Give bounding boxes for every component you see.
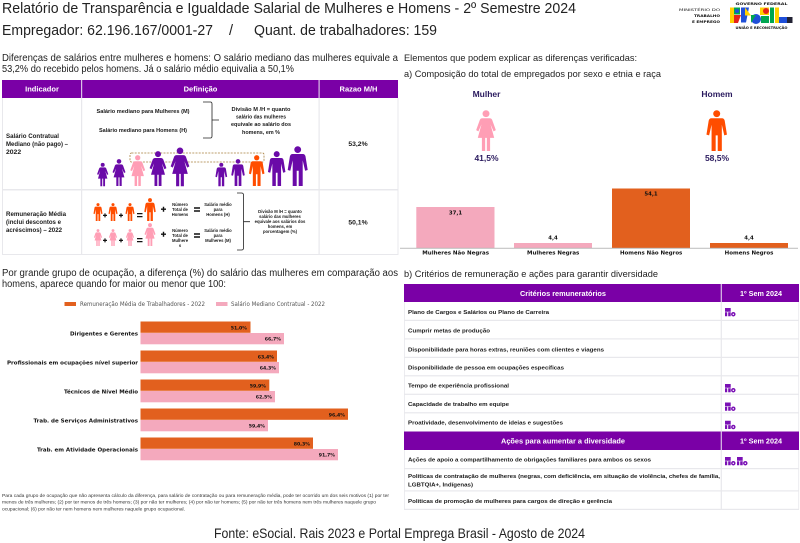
value labels: 64,3% [260, 366, 276, 372]
subheading b: b) Critérios de remuneração e ações para garantir diversidade [404, 269, 658, 280]
bars [140, 322, 348, 460]
average division explanation: salário das mulheres [259, 214, 301, 219]
subheading a: a) Composição do total de empregados por sexo e etnia e raça [404, 69, 662, 80]
employer information: Empregador: 62.196.167/0001-27 [2, 23, 213, 39]
criteria rows: Disponibilidade para horas extras, reuniões com clientes e viagens [408, 347, 605, 353]
formula: men average: Salário médio [204, 202, 232, 207]
bar chart: composition by sex and race [400, 188, 798, 257]
value labels: 62,5% [256, 395, 272, 401]
median division explanation: Divisão M /H = quanto [232, 107, 291, 113]
row definition: median salary text [96, 109, 190, 134]
bar chart: composition by sex and race: Mulheres Negras [527, 251, 579, 257]
bar chart: composition by sex and race: Homens Não Negros [620, 251, 682, 257]
panel: criteria table [404, 284, 799, 510]
table header [2, 80, 398, 98]
median division explanation: equivale ao salário dos [231, 122, 291, 128]
diversity rows [408, 458, 720, 505]
criteria rows: Cumprir metas de produção [408, 328, 490, 334]
formula: men average: para [214, 207, 223, 212]
formula: men average: Total de [172, 207, 189, 212]
panel: Mulher share [473, 89, 501, 163]
legend: Remuneração Média de Trabalhadores - 2022 [80, 301, 205, 308]
icons: diversity marks [725, 457, 747, 465]
icons: criteria marks [725, 308, 735, 429]
header: Ações para aumentar a diversidade: Ações para aumentar a diversidade [501, 438, 625, 446]
row label: Salário Contratual Mediano: 2022 [6, 149, 21, 156]
median division explanation [231, 107, 291, 136]
occupation heading: Por grande grupo de ocupação, a diferença (%) do salário das mulheres em comparação aos [2, 268, 398, 279]
header: Ações para aumentar a diversidade [404, 432, 799, 450]
bar chart: occupations [7, 301, 348, 460]
diversity rows: LGBTQIA+, Indígenas) [408, 482, 473, 488]
bar chart: composition by sex and race: Homens Negros [725, 251, 773, 257]
category labels: Trab. de Serviços Administrativos [34, 418, 139, 424]
value labels: 63,4% [258, 354, 274, 360]
category labels: Trab. em Atividade Operacionais [37, 447, 139, 453]
logo: Governo Federal Brasil: GOVERNO FEDERAL [736, 1, 788, 6]
header: Critérios remuneratórios: 1º Sem 2024 [740, 291, 782, 298]
bracket: median [203, 102, 219, 138]
value labels: 91,7% [319, 453, 335, 459]
bar chart: composition by sex and race: 4,4 [744, 235, 754, 241]
logo: Ministério do Trabalho e Emprego: MINISTÉRIO DO [679, 7, 720, 12]
logo: Governo Federal Brasil: UNIÃO E RECONSTRUÇÃO [736, 25, 788, 30]
bracket: average [237, 193, 250, 250]
average division explanation: equivale aos salários dos [255, 219, 306, 224]
median division explanation: salário das mulheres [236, 114, 286, 120]
header: Ações para aumentar a diversidade: 1º Sem 2024 [740, 438, 782, 446]
formula: women average: Mulhere [172, 238, 189, 243]
formula: women average: Número [172, 228, 188, 233]
intro text: salary differences [2, 53, 398, 75]
legend: Salário Mediano Contratual - 2022 [231, 301, 325, 308]
criteria rows: Disponibilidade de pessoa em ocupações específicas [408, 366, 565, 372]
panel: Mulher share: Mulher [473, 89, 501, 99]
header: Critérios remuneratórios: Critérios remuneratórios [520, 291, 606, 298]
formula: women average: para [214, 233, 223, 238]
logo: Governo Federal Brasil [730, 1, 792, 30]
average division explanation: homens, em [268, 224, 292, 229]
employer information: / [229, 23, 234, 39]
category labels: Profissionais em ocupações nível superior [7, 359, 138, 366]
panel: Homem share [701, 89, 733, 163]
bar chart: composition by sex and race: 37,1 [449, 210, 462, 216]
row label: Remuneração Média: acréscimos) – 2022 [6, 227, 62, 234]
row label: Salário Contratual Mediano [6, 133, 68, 156]
median dashed highlight [130, 153, 264, 162]
value: 53,2%: 53,2% [348, 141, 368, 148]
criteria rows: Tempo de experiência profissional [408, 384, 509, 390]
logo: Ministério do Trabalho e Emprego [679, 7, 720, 24]
value labels [231, 325, 345, 459]
footnote [2, 493, 389, 512]
footnote: Para cada grupo de ocupação que não apresenta cálculo da diferença, para salário de contratação ou para remuneração média, pode ter ocorrido um dos seis motivos (1) por ter [2, 493, 389, 499]
value labels: 66,7% [265, 337, 281, 343]
table header: Razao M/H [340, 84, 377, 94]
formula: men average: Número [172, 202, 188, 207]
diversity rows: Ações de apoio a compartilhamento de obrigações familiares para ambos os sexos [408, 458, 652, 464]
category labels [7, 331, 139, 453]
table header: Indicador [25, 84, 59, 94]
row definition: median salary text: Salário mediano para Mulheres (M) [96, 109, 190, 115]
icons: five women in ascending order [97, 147, 189, 186]
value labels: 59,4% [249, 424, 265, 430]
intro text: salary differences: Diferenças de salários entre mulheres e homens: O salário mediano das mulheres equivale a [2, 53, 398, 64]
bar chart: composition by sex and race: 4,4 [548, 235, 558, 241]
row label: Remuneração Média: (inclui descontos e [6, 219, 61, 226]
bar chart: composition by sex and race: 54,1 [644, 192, 658, 198]
panel: Mulher share: 41,5% [474, 153, 499, 163]
criteria rows [408, 310, 605, 427]
formula: women average [94, 223, 232, 248]
criteria rows: Capacidade de trabalho em equipe [408, 402, 510, 408]
average division explanation: porcentagem (%) [263, 229, 298, 234]
value labels: 59,9% [250, 383, 266, 389]
logo: Ministério do Trabalho e Emprego: TRABALHO [694, 14, 720, 18]
panel: indicator table [2, 80, 398, 255]
row label: Salário Contratual Mediano: Mediano (não pago) – [6, 141, 68, 148]
diversity rows: Políticas de contratação de mulheres (negras, com deficiência, em situação de violência, chefes de família, [408, 474, 720, 480]
table header: Definição [184, 84, 218, 94]
median division explanation: homens, em % [242, 130, 280, 136]
row label: Remuneração Média [6, 211, 66, 234]
formula: women average: Salário médio [204, 228, 232, 233]
footnote: menos de três mulheres; (2) por ter menos de três homens; (3) por não ter mulheres; (4) por não ter homens; (5) por não ter três homens nem três mulheres naquele grupo [2, 500, 376, 506]
title: Relatório de Transparência e Igualdade Salarial de Mulheres e Homens - 2º Semestre 2024 [2, 0, 576, 17]
average division explanation [255, 209, 306, 234]
value: 50,1%: 50,1% [348, 220, 368, 226]
employer information [2, 23, 437, 39]
criteria rows: Proatividade, desenvolvimento de ideias e sugestões [408, 421, 564, 427]
criteria rows: Plano de Cargos e Salários ou Plano de Carreira [408, 310, 550, 316]
employer information: Quant. de trabalhadores: 159 [254, 23, 437, 39]
formula: women average: Total de [172, 233, 189, 238]
value labels: 80,3% [294, 441, 310, 447]
occupation heading [2, 268, 398, 290]
average division explanation: Divisão M /H = quanto [258, 209, 302, 214]
panel: Homem share: 58,5% [705, 153, 729, 163]
footnote: ocupacional; (6) por não ter nem homens nem mulheres naquele grupo ocupacional. [2, 506, 185, 512]
row label: Salário Contratual Mediano: Salário Contratual [6, 133, 59, 140]
right heading: explanatory elements: Elementos que podem explicar as diferenças verificadas: [404, 53, 637, 64]
formula: men average: Homens (H) [206, 212, 230, 217]
source footer: Fonte: eSocial. Rais 2023 e Portal Emprega Brasil - Agosto de 2024 [214, 525, 585, 541]
row definition: median salary text: Salário mediano para Homens (H) [99, 128, 187, 134]
logo: Ministério do Trabalho e Emprego: E EMPREGO [692, 20, 720, 24]
value labels: 96,4% [329, 412, 345, 418]
formula: men average: Homens [172, 212, 189, 217]
legend [64, 301, 325, 308]
occupation heading: homens, aparece quando for maior ou menor que 100: [2, 279, 226, 290]
formula: men average [94, 198, 232, 221]
formula: women average: s [179, 243, 182, 248]
intro text: salary differences: 53,2% do recebido pelos homens. Já o salário médio equivalia a 50,1% [2, 64, 294, 75]
diversity rows: Políticas de promoção de mulheres para cargos de direção e gerência [408, 499, 613, 505]
row label: Remuneração Média: Remuneração Média [6, 211, 66, 218]
category labels: Dirigentes e Gerentes [70, 331, 139, 337]
bar chart: composition by sex and race: Mulheres Não Negras [422, 251, 489, 257]
header: Critérios remuneratórios [404, 284, 799, 302]
panel: Homem share: Homem [701, 89, 733, 99]
value labels: 51,0% [231, 325, 247, 331]
formula: women average: Mulheres (M) [205, 238, 232, 243]
icons: five men in ascending order [215, 146, 308, 186]
category labels: Técnicos de Nível Médio [64, 388, 138, 395]
